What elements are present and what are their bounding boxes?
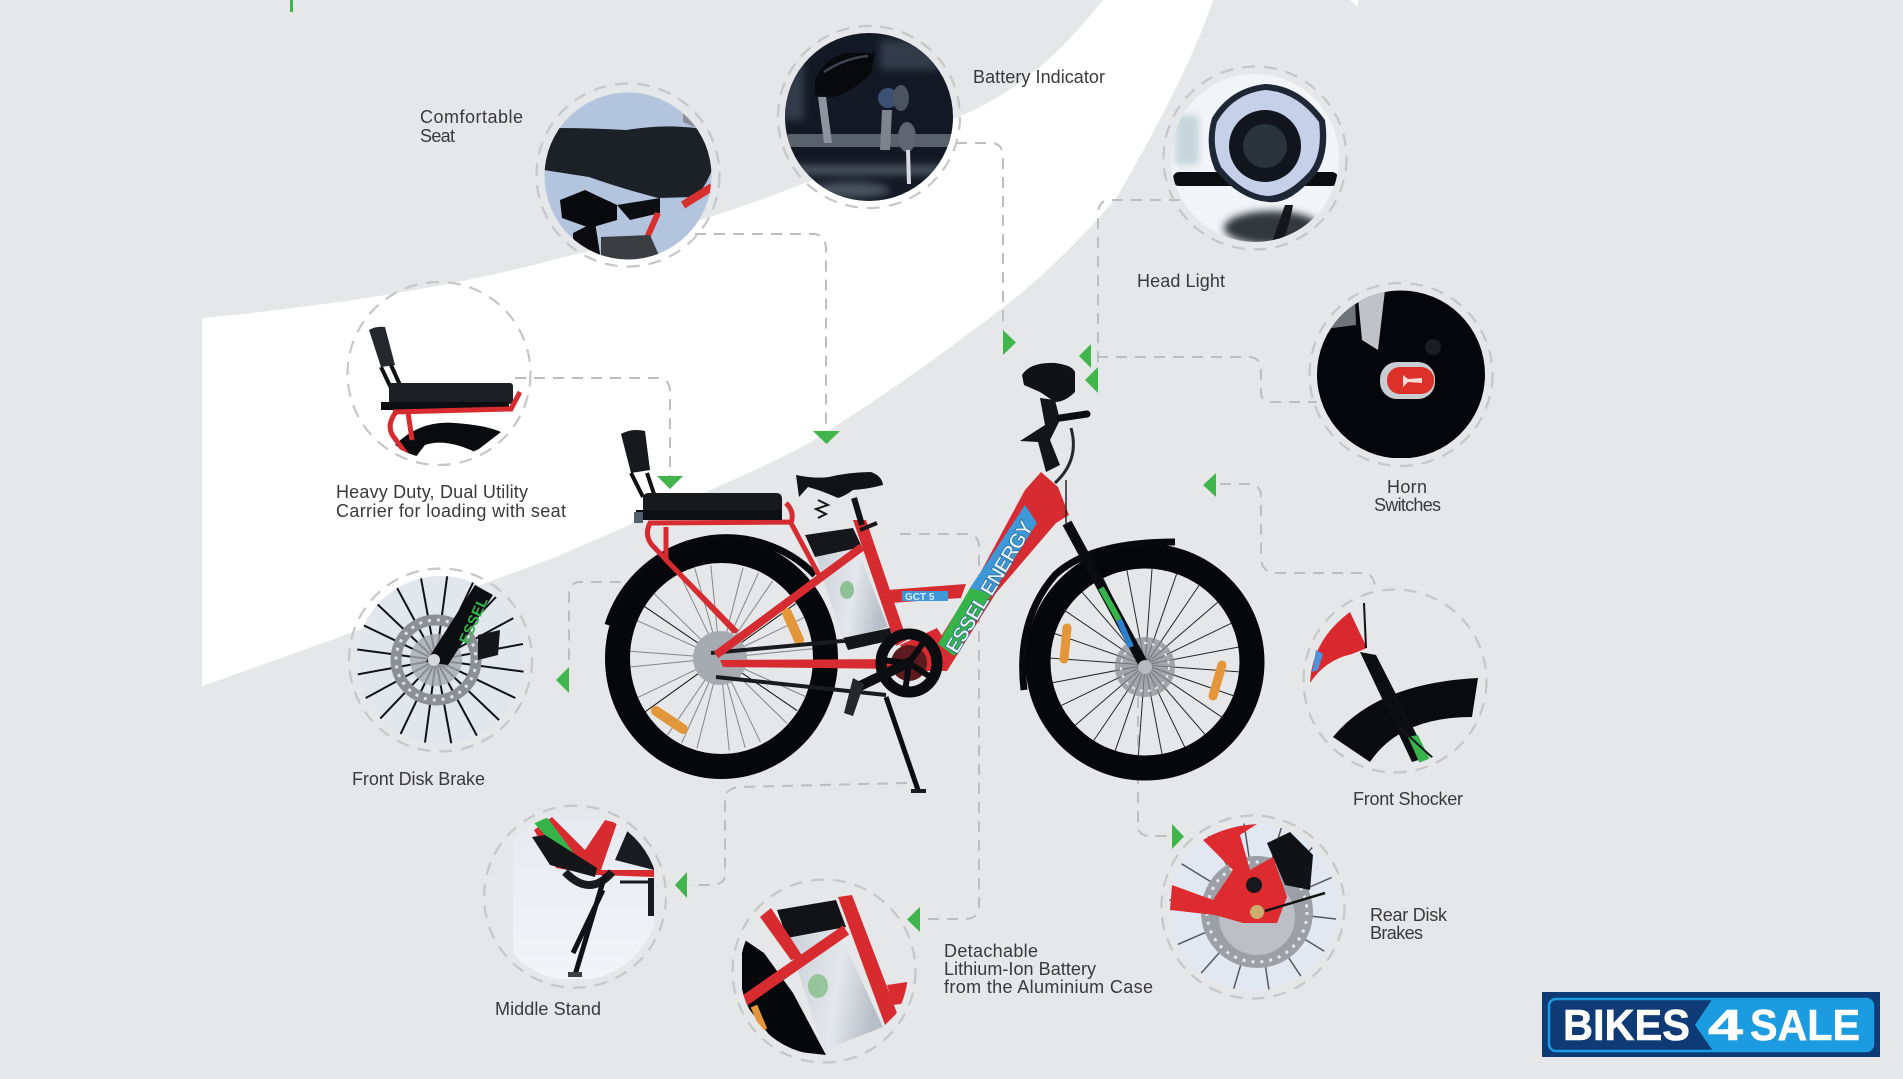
dashed ring (732, 880, 916, 1062)
arrow: head light (1079, 344, 1091, 368)
label: Front Disk Brake (352, 769, 485, 789)
photo: seat (544, 92, 712, 262)
connector: horn switch to bike (1097, 357, 1317, 402)
label: Lithium-Ion Battery (944, 959, 1096, 979)
frame decal: ESSEL ENERGY (942, 517, 1039, 658)
saddle (796, 472, 883, 530)
label: Detachable (944, 941, 1038, 961)
rear wheel (608, 538, 826, 766)
rear seat and carrier (621, 430, 782, 523)
label: from the Aluminium Case (944, 977, 1153, 997)
dashed ring (1164, 66, 1346, 250)
kick stand (886, 697, 926, 793)
arrow: carrier (657, 476, 683, 489)
arrow: front disk brake (556, 667, 569, 693)
bicycle illustration (608, 363, 1252, 793)
connector: battery to bike (900, 534, 979, 919)
connector: comfortable seat to bike (695, 234, 826, 430)
logo: bikes 4 sale: 4 (1708, 1001, 1744, 1050)
photo: rear disk (1169, 822, 1345, 998)
detachable battery (805, 528, 893, 650)
handlebar and headlight (1020, 363, 1087, 525)
front fork (1067, 523, 1152, 674)
front wheel (1023, 542, 1252, 768)
frame (647, 472, 1069, 671)
connector: battery indicator to bike (956, 143, 1003, 330)
dashed ring (349, 568, 532, 752)
dashed ring (1162, 816, 1344, 998)
connector: front disk brake to bike (569, 582, 640, 667)
dashed ring (1310, 283, 1492, 466)
connector: middle stand to bike (690, 783, 907, 885)
label: Brakes (1370, 923, 1423, 943)
background white swoosh (202, 0, 1213, 686)
dashed ring (348, 282, 530, 465)
crank and pedal (844, 634, 937, 716)
feature: head light (1137, 66, 1346, 291)
feature: horn switches (1310, 283, 1492, 515)
label: Middle Stand (495, 999, 601, 1019)
connector: carrier to bike (515, 378, 670, 476)
feature: carrier (336, 282, 566, 521)
feature: middle stand (484, 806, 666, 1019)
dashed ring (1304, 590, 1486, 772)
connector: head light to bike (1098, 200, 1180, 367)
photo: carrier (369, 327, 520, 458)
logo: bikes 4 sale: BIKES (1563, 1001, 1690, 1050)
label: Seat (420, 126, 455, 146)
frame decal: GCT 5 (905, 592, 935, 603)
label: Front Shocker (1353, 789, 1463, 809)
arrow: rear disk brakes (1172, 824, 1184, 849)
feature: front disk brake (346, 568, 532, 789)
label: Switches (1374, 495, 1441, 515)
arrow: battery indicator (1003, 330, 1016, 355)
arrow: battery (907, 907, 920, 932)
photo: disk brake (357, 576, 524, 744)
frame decal (902, 505, 1039, 658)
label: Rear Disk (1370, 905, 1448, 925)
logo: bikes 4 sale: SALE (1750, 1001, 1860, 1050)
arrow: middle stand (675, 872, 687, 898)
photo: battery (742, 895, 907, 1055)
feature: front shocker (1304, 590, 1486, 809)
feature: rear disk brakes (1162, 816, 1448, 998)
photo: front shocker (1310, 603, 1478, 764)
label: Heavy Duty, Dual Utility (336, 482, 528, 502)
label: Carrier for loading with seat (336, 501, 566, 521)
photo: middle stand (513, 813, 654, 979)
dashed ring (484, 806, 666, 988)
label: Horn (1387, 477, 1427, 497)
logo: bikes 4 sale (1542, 992, 1880, 1057)
label: Battery Indicator (973, 67, 1105, 87)
dashed ring (778, 26, 960, 208)
feature: comfortable seat (420, 84, 720, 266)
chain (711, 637, 886, 695)
front reflectors (1064, 628, 1222, 696)
arrow: horn switch (1085, 367, 1098, 393)
label: Head Light (1137, 271, 1225, 291)
label: Comfortable (420, 107, 523, 127)
photo: disk brake: ESSEL (456, 595, 492, 647)
connector: front shocker to bike (1220, 484, 1375, 590)
photo: horn switch (1317, 290, 1485, 458)
feature: detachable battery (732, 880, 1153, 1062)
arrow: front shocker (1203, 473, 1216, 497)
connector: rear disk brakes to bike (1138, 697, 1172, 836)
photo: bell and key (780, 32, 955, 202)
rear reflectors (656, 613, 799, 729)
feature: battery indicator (778, 26, 1105, 208)
dashed ring (536, 84, 720, 266)
photo: head light (1171, 74, 1339, 245)
arrow: comfortable seat (813, 431, 840, 444)
